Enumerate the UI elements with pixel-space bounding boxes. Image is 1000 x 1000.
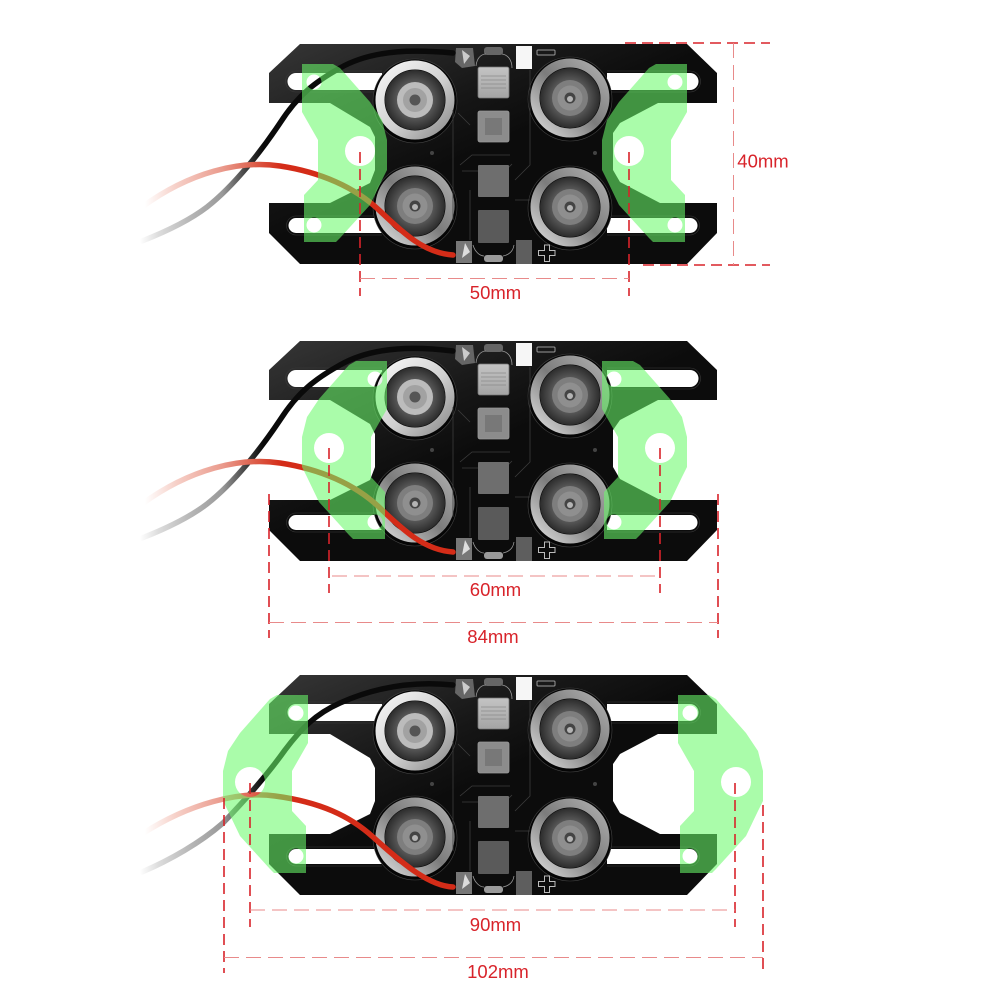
right bracket	[678, 695, 763, 873]
dimension: 60mm: 60mm	[470, 579, 521, 600]
black and red wires	[142, 348, 453, 552]
circuit board with magnets	[269, 675, 717, 895]
dimension: 60mm	[329, 448, 660, 600]
black and red wires	[142, 51, 453, 255]
left bracket	[302, 64, 387, 242]
black and red wires	[142, 684, 453, 887]
left bracket	[223, 695, 308, 873]
dimension: 84mm	[269, 494, 718, 647]
left bracket	[302, 361, 387, 539]
dimension: 90mm: 90mm	[470, 914, 521, 935]
dimension: 102mm	[224, 798, 763, 982]
panel: 90mm / 102mm configuration	[142, 675, 763, 982]
circuit board with magnets	[269, 44, 717, 264]
dimension: 50mm: 50mm	[470, 282, 521, 303]
dimension: 50mm	[360, 152, 629, 303]
dimension: 84mm: 84mm	[467, 626, 519, 647]
circuit board with magnets	[269, 341, 717, 561]
dimension: 40mm: 40mm	[737, 150, 789, 172]
panel: 60mm / 84mm configuration	[142, 341, 718, 647]
right bracket	[602, 64, 687, 242]
dimension: 90mm	[250, 783, 735, 935]
right bracket	[602, 361, 687, 539]
panel: 50mm × 40mm configuration	[142, 43, 789, 303]
dimension: 102mm: 102mm	[467, 961, 529, 982]
dimension: 40mm	[625, 43, 789, 265]
